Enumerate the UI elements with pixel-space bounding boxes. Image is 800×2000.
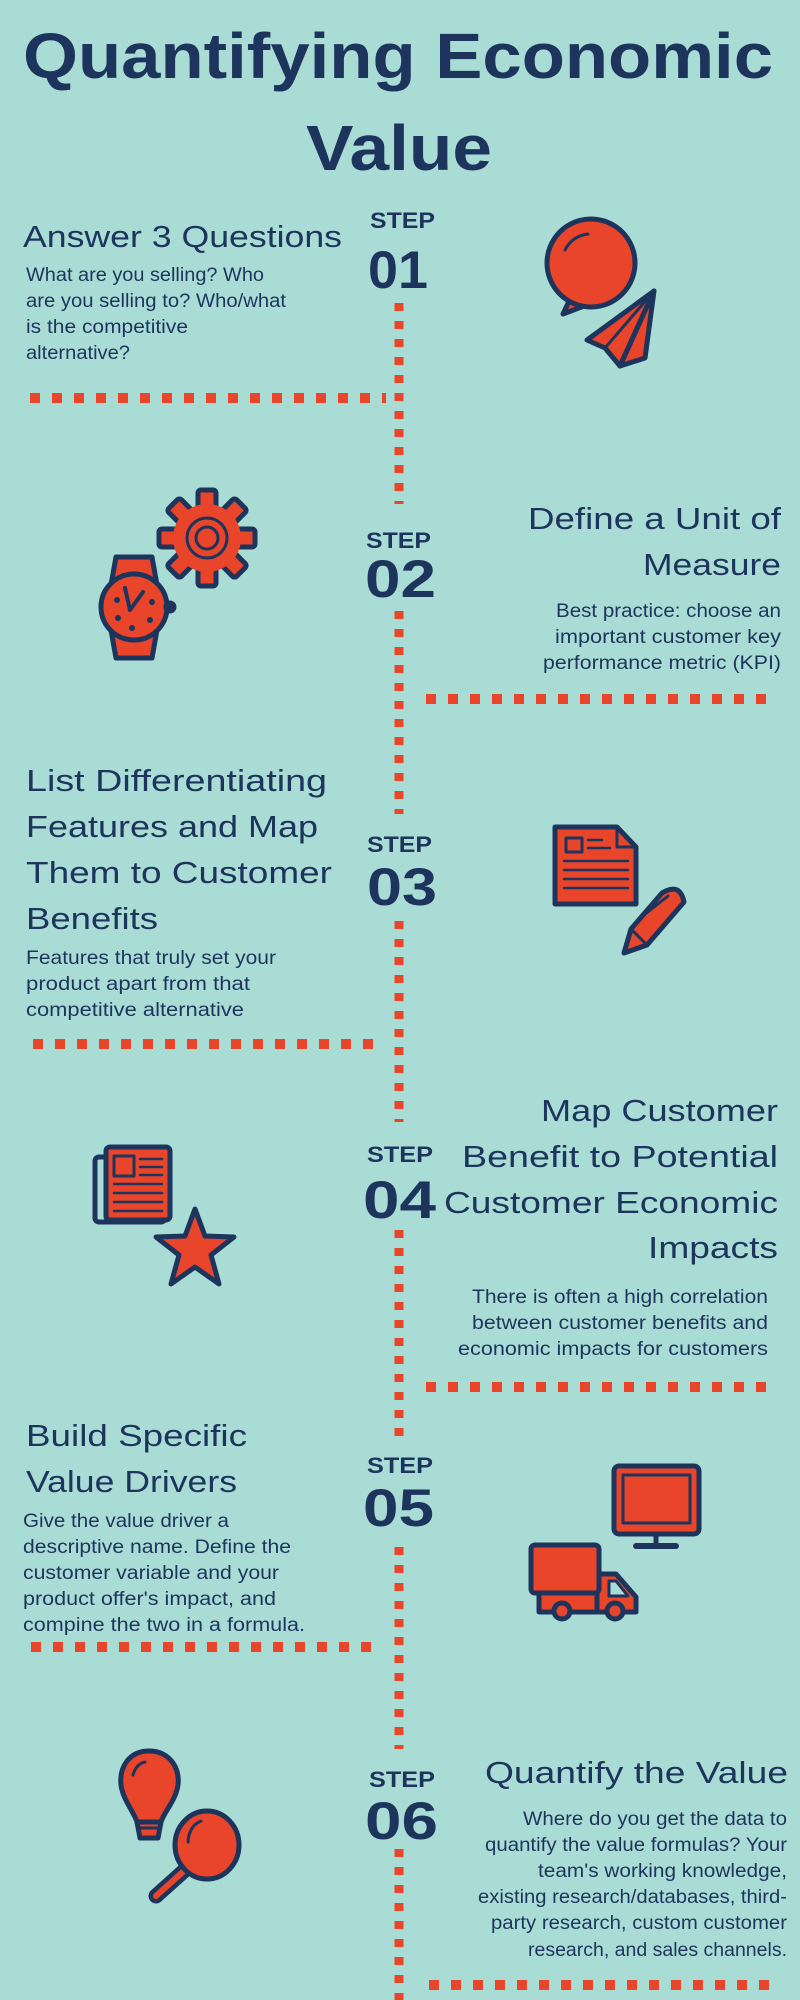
body text step 05: descriptive name. Define the bbox=[23, 1537, 291, 1558]
step label 04 bbox=[363, 1142, 437, 1230]
body text step 01: What are you selling? Who bbox=[26, 265, 264, 286]
heading: Define a Unit of Measure: Define a Unit of bbox=[528, 501, 781, 536]
heading: Define a Unit of Measure bbox=[528, 501, 781, 582]
body text step 02: Best practice: choose an bbox=[556, 601, 781, 622]
heading: Map Customer Benefit: Customer Economic bbox=[444, 1185, 778, 1220]
icon: gear and wristwatch bbox=[101, 490, 255, 658]
step 06 bbox=[121, 1751, 788, 1961]
icon: light bulb and magnifying glass bbox=[121, 1751, 239, 1896]
step label 03: STEP bbox=[367, 832, 432, 857]
body text step 04: between customer benefits and bbox=[472, 1313, 768, 1334]
body text step 05: Give the value driver a bbox=[23, 1511, 229, 1532]
step 05 bbox=[23, 1418, 699, 1636]
heading: Define a Unit of Measure: Measure bbox=[643, 547, 781, 582]
horizontal dotted connectors bbox=[30, 398, 770, 1985]
step 04 bbox=[95, 1093, 778, 1360]
step label 04: STEP bbox=[367, 1142, 433, 1167]
step label 02 bbox=[365, 528, 436, 609]
body text step 04 bbox=[458, 1287, 768, 1360]
vertical dotted timeline bbox=[394, 303, 404, 2000]
body text step 03 bbox=[26, 948, 277, 1021]
body text step 06 bbox=[478, 1809, 788, 1961]
body text step 06: existing research/databases, third- bbox=[478, 1887, 787, 1908]
icon: newspaper and star bbox=[95, 1147, 234, 1284]
body text step 05 bbox=[23, 1511, 305, 1636]
body text step 01 bbox=[26, 265, 287, 364]
step label 05: STEP bbox=[367, 1453, 433, 1478]
step label 04: 04 bbox=[363, 1171, 437, 1230]
heading: Build Specific Value Drivers: Value Drivers bbox=[26, 1464, 237, 1499]
heading: List Differentiating Features: Benefits bbox=[26, 901, 158, 936]
body text step 05: customer variable and your bbox=[23, 1563, 280, 1584]
heading: Build Specific Value Drivers: Build Specific bbox=[26, 1418, 247, 1453]
heading: List Differentiating Features: List Differentiating bbox=[26, 763, 327, 798]
body text step 02 bbox=[543, 601, 782, 674]
body text step 02: performance metric (KPI) bbox=[543, 653, 781, 674]
heading: List Differentiating Features: Them to Customer bbox=[26, 855, 332, 890]
step 02 bbox=[101, 490, 782, 674]
icon: monitor and truck bbox=[531, 1466, 699, 1619]
body text step 01: alternative? bbox=[26, 343, 130, 364]
icon: speech bubble and paper plane bbox=[547, 219, 654, 366]
step label 06: 06 bbox=[365, 1792, 438, 1851]
heading: List Differentiating Features bbox=[26, 763, 332, 936]
title: Value bbox=[306, 112, 492, 184]
body text step 01: is the competitive bbox=[26, 317, 188, 338]
heading: Build Specific Value Drivers bbox=[26, 1418, 247, 1499]
body text step 06: Where do you get the data to bbox=[523, 1809, 787, 1830]
step label 02: 02 bbox=[365, 550, 436, 609]
step label 03 bbox=[367, 832, 437, 917]
title: Quantifying Economic bbox=[23, 20, 773, 92]
body text step 06: team's working knowledge, bbox=[538, 1861, 787, 1882]
icon: document and pencil bbox=[555, 827, 684, 953]
body text step 03: competitive alternative bbox=[26, 1000, 244, 1021]
heading: Map Customer Benefit: Impacts bbox=[648, 1230, 778, 1265]
body text step 03: product apart from that bbox=[26, 974, 251, 995]
body text step 02: important customer key bbox=[555, 627, 782, 648]
step label 06 bbox=[365, 1767, 438, 1851]
step label 01: 01 bbox=[368, 241, 428, 300]
step label 01: STEP bbox=[370, 208, 435, 233]
heading: Map Customer Benefit: Benefit to Potential bbox=[462, 1139, 778, 1174]
body text step 03: Features that truly set your bbox=[26, 948, 277, 969]
heading: Map Customer Benefit bbox=[444, 1093, 778, 1265]
step label 06: STEP bbox=[369, 1767, 435, 1792]
body text step 04: There is often a high correlation bbox=[472, 1287, 768, 1308]
heading: List Differentiating Features: Features and Map bbox=[26, 809, 318, 844]
body text step 06: research, and sales channels. bbox=[528, 1940, 787, 1961]
step label 01 bbox=[368, 208, 435, 300]
step label 03: 03 bbox=[367, 858, 437, 917]
body text step 05: product offer's impact, and bbox=[23, 1589, 276, 1610]
body text step 06: quantify the value formulas? Your bbox=[485, 1835, 788, 1856]
heading: Quantify the Value: Quantify the Value bbox=[485, 1755, 788, 1790]
title bbox=[23, 20, 773, 184]
heading: Map Customer Benefit: Map Customer bbox=[541, 1093, 778, 1128]
step label 05: 05 bbox=[363, 1479, 434, 1538]
step label 02: STEP bbox=[366, 528, 431, 553]
body text step 06: party research, custom customer bbox=[491, 1913, 788, 1934]
heading: Answer 3 Questions: Answer 3 Questions bbox=[23, 219, 342, 254]
body text step 05: compine the two in a formula. bbox=[23, 1615, 305, 1636]
body text step 04: economic impacts for customers bbox=[458, 1339, 768, 1360]
body text step 01: are you selling to? Who/what bbox=[26, 291, 287, 312]
step label 05 bbox=[363, 1453, 434, 1538]
step 01 bbox=[23, 208, 654, 366]
step 03 bbox=[26, 763, 684, 1021]
